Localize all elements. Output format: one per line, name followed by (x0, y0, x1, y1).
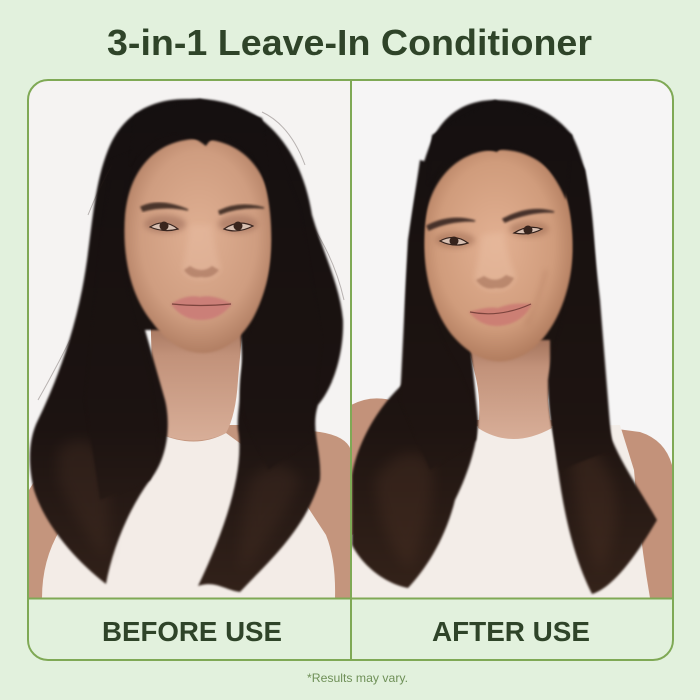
front hair, right of face (548, 125, 612, 470)
shoulders (351, 398, 672, 598)
hair crown (428, 100, 572, 200)
panel: after photo (351, 81, 672, 598)
front hair, left of face (94, 446, 153, 498)
lips (469, 304, 532, 326)
nose (186, 248, 218, 270)
cheek shadow (526, 270, 546, 325)
hair: back silhouette (352, 100, 657, 594)
title: 3-in-1 Leave-In Conditioner (107, 22, 592, 63)
eyebrows (427, 218, 475, 230)
shoulders (29, 425, 351, 598)
face (124, 139, 273, 353)
front hair, right of face (238, 176, 274, 403)
facial features (427, 210, 554, 326)
panel: before photo (29, 81, 351, 598)
flyaway hair (38, 112, 344, 400)
hair crown (134, 98, 264, 147)
comparison frame (28, 80, 673, 660)
eye shadows (435, 232, 475, 248)
eyebrows (141, 203, 188, 211)
eyes (150, 223, 178, 231)
after use label: AFTER USE (432, 616, 590, 647)
neck (470, 338, 552, 439)
white top (42, 433, 335, 598)
before use label: BEFORE USE (102, 616, 282, 647)
footnote: *Results may vary. (307, 671, 408, 685)
eye shadows (144, 215, 186, 233)
hair highlights (60, 442, 294, 548)
facial features (141, 203, 264, 320)
lips (171, 296, 232, 320)
panel: after label (351, 598, 672, 659)
hair: back silhouette (30, 99, 343, 592)
nose (476, 238, 514, 280)
front hair, left of face (400, 160, 476, 470)
face (424, 150, 573, 361)
neck (150, 328, 242, 440)
white top (352, 425, 650, 598)
hair highlights (378, 455, 614, 556)
eyes (440, 237, 468, 245)
panel: before label (29, 598, 351, 659)
